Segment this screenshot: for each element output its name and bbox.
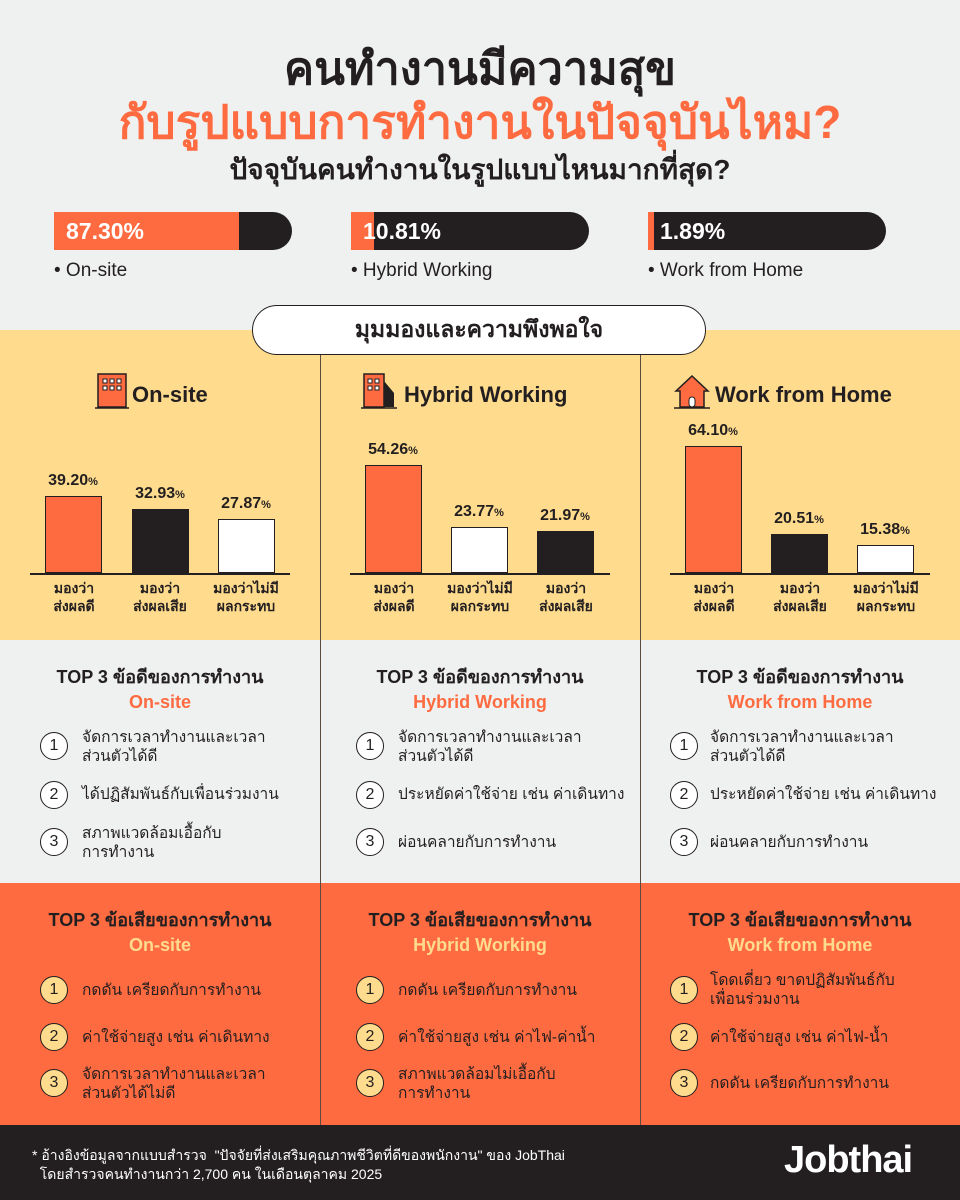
yellow section [0, 330, 960, 640]
legend: hybrid: • Hybrid Working [351, 260, 492, 281]
footer [0, 1125, 960, 1200]
panel: cons hybrid [356, 910, 595, 1102]
footnote [32, 1146, 565, 1183]
panel: pros on-site: ส่วนตัวได้ดี [82, 748, 157, 765]
panel: on-site chart: ส่งผลเสีย [133, 598, 187, 614]
panel: wfh chart: 15.38% [860, 521, 910, 538]
panel: pros hybrid: ประหยัดค่าใช้จ่าย เช่น ค่าเดินทาง [398, 786, 624, 803]
panel: cons on-site: กดดัน เครียดกับการทำงาน [82, 982, 261, 999]
panel: wfh chart: 20.51% [774, 510, 824, 527]
bar: wfh: 1.89% [660, 218, 725, 244]
panel: hybrid chart: มองว่า [546, 580, 586, 596]
panel: on-site chart: มองว่าไม่มี [213, 580, 279, 596]
panel: pros on-site: 3 [50, 833, 58, 850]
panel: on-site chart: 27.87% [221, 495, 271, 512]
footnote: * อ้างอิงข้อมูลจากแบบสำรวจ "ปัจจัยที่ส่งเสริมคุณภาพชีวิตที่ดีของพนักงาน" ของ JobThai [32, 1147, 565, 1163]
panel: hybrid chart: 23.77% [454, 503, 504, 520]
panel: pros hybrid [356, 667, 624, 856]
panel: pros wfh: 2 [680, 786, 688, 803]
bar: on-site: 87.30% [66, 218, 144, 244]
panel: cons on-site: ค่าใช้จ่ายสูง เช่น ค่าเดินทาง [82, 1029, 270, 1046]
panel: pros on-site: จัดการเวลาทำงานและเวลา [82, 729, 266, 746]
panel: wfh chart: Work from Home [715, 382, 892, 407]
panel: cons wfh: ค่าใช้จ่ายสูง เช่น ค่าไฟ-น้ำ [710, 1029, 888, 1046]
panel: cons on-site: TOP 3 ข้อเสียของการทำงาน [49, 910, 271, 930]
panel: hybrid chart: ส่งผลเสีย [539, 598, 593, 614]
panel: pros on-site: สภาพแวดล้อมเอื้อกับ [82, 825, 222, 842]
panel: pros hybrid: 2 [366, 786, 374, 803]
panel: pros on-site: 1 [50, 737, 58, 754]
panel: cons hybrid: Hybrid Working [413, 935, 547, 955]
panel: cons hybrid: TOP 3 ข้อเสียของการทำงาน [369, 910, 591, 930]
panel: pros wfh: จัดการเวลาทำงานและเวลา [710, 729, 894, 746]
icon: hybrid building [361, 373, 397, 409]
panel: cons hybrid: 1 [366, 981, 374, 998]
panel: wfh chart [670, 375, 930, 614]
panel: on-site chart: 39.20% [48, 472, 98, 489]
logo: Jobthai [784, 1139, 912, 1181]
panel: cons on-site: ส่วนตัวได้ไม่ดี [82, 1085, 175, 1102]
panel: hybrid chart: มองว่าไม่มี [447, 580, 513, 596]
panel: cons wfh: TOP 3 ข้อเสียของการทำงาน [689, 910, 911, 930]
panel: pros hybrid: TOP 3 ข้อดีของการทำงาน [377, 667, 583, 687]
panel: hybrid chart: 54.26% [368, 441, 418, 458]
panel: hybrid chart [350, 373, 610, 614]
legend: wfh: • Work from Home [648, 260, 803, 281]
panel: cons on-site: 2 [50, 1028, 58, 1045]
panel: cons on-site: จัดการเวลาทำงานและเวลา [82, 1066, 266, 1083]
panel: pros wfh: ประหยัดค่าใช้จ่าย เช่น ค่าเดินทาง [710, 786, 936, 803]
gray section [0, 640, 960, 883]
panel: cons wfh: กดดัน เครียดกับการทำงาน [710, 1075, 889, 1092]
panel: wfh chart: ส่งผลดี [693, 598, 735, 614]
panel: pros on-site: การทำงาน [82, 844, 154, 861]
panel: cons hybrid: 2 [366, 1028, 374, 1045]
panel: cons wfh: เพื่อนร่วมงาน [710, 991, 800, 1008]
panel: pros hybrid: Hybrid Working [413, 692, 547, 712]
panel: wfh chart: 64.10% [688, 422, 738, 439]
panel: pros hybrid: ผ่อนคลายกับการทำงาน [398, 834, 556, 851]
title [119, 43, 841, 187]
bar: hybrid [351, 212, 589, 250]
panel: wfh chart: มองว่า [694, 580, 734, 596]
panel: pros on-site: On-site [129, 692, 191, 712]
panel: cons hybrid: 3 [366, 1074, 374, 1091]
title: ปัจจุบันคนทำงานในรูปแบบไหนมากที่สุด? [230, 154, 730, 185]
panel: cons on-site: 3 [50, 1074, 58, 1091]
panel: on-site chart: 32.93% [135, 485, 185, 502]
panel: cons hybrid: การทำงาน [398, 1085, 470, 1102]
panel: cons wfh: โดดเดี่ยว ขาดปฏิสัมพันธ์กับ [710, 972, 895, 989]
pill heading [252, 305, 706, 355]
icon: building [95, 373, 129, 409]
panel: cons wfh: Work from Home [728, 935, 872, 955]
panel: cons hybrid: ค่าใช้จ่ายสูง เช่น ค่าไฟ-ค่าน้ำ [398, 1029, 595, 1046]
panel: pros wfh: 1 [680, 737, 688, 754]
panel: wfh chart: ส่งผลเสีย [773, 598, 827, 614]
bar: wfh [648, 212, 886, 250]
panel: on-site chart: On-site [132, 382, 208, 407]
panel: cons wfh: 3 [680, 1074, 688, 1091]
panel: pros on-site: 2 [50, 786, 58, 803]
panel: on-site chart: ส่งผลดี [53, 598, 95, 614]
panel: cons on-site: 1 [50, 981, 58, 998]
panel: pros wfh: ผ่อนคลายกับการทำงาน [710, 834, 868, 851]
panel: pros on-site: TOP 3 ข้อดีของการทำงาน [57, 667, 263, 687]
panel: pros hybrid: 3 [366, 833, 374, 850]
panel: hybrid chart: Hybrid Working [404, 382, 567, 407]
icon: house [674, 375, 710, 409]
footnote: โดยสำรวจคนทำงานกว่า 2,700 คน ในเดือนตุลาคม 2025 [40, 1166, 382, 1182]
panel: wfh chart: ผลกระทบ [857, 598, 915, 614]
panel: hybrid chart: มองว่า [374, 580, 414, 596]
bar: on-site [54, 212, 292, 250]
panel: cons wfh: 1 [680, 981, 688, 998]
title: คนทำงานมีความสุข [284, 43, 676, 94]
panel: on-site chart: ผลกระทบ [217, 598, 275, 614]
panel: hybrid chart: 21.97% [540, 507, 590, 524]
panel: on-site chart: มองว่า [54, 580, 94, 596]
legend: on-site: • On-site [54, 260, 127, 281]
panel: hybrid chart: ส่งผลดี [373, 598, 415, 614]
panel: wfh chart: มองว่าไม่มี [853, 580, 919, 596]
panel: cons on-site [40, 910, 272, 1102]
panel: pros wfh: TOP 3 ข้อดีของการทำงาน [697, 667, 903, 687]
panel: cons hybrid: กดดัน เครียดกับการทำงาน [398, 982, 577, 999]
panel: pros hybrid: ส่วนตัวได้ดี [398, 748, 473, 765]
panel: on-site chart: มองว่า [140, 580, 180, 596]
panel: wfh chart: มองว่า [780, 580, 820, 596]
panel: pros wfh [670, 667, 936, 856]
panel: pros on-site: ได้ปฏิสัมพันธ์กับเพื่อนร่วมงาน [82, 786, 279, 803]
panel: pros hybrid: 1 [366, 737, 374, 754]
panel: pros wfh: 3 [680, 833, 688, 850]
title: กับรูปแบบการทำงานในปัจจุบันไหม? [119, 96, 841, 148]
panel: cons on-site: On-site [129, 935, 191, 955]
pill heading: มุมมองและความพึงพอใจ [355, 316, 603, 342]
panel: cons wfh: 2 [680, 1028, 688, 1045]
panel: pros wfh: Work from Home [728, 692, 872, 712]
panel: pros hybrid: จัดการเวลาทำงานและเวลา [398, 729, 582, 746]
panel: cons hybrid: สภาพแวดล้อมไม่เอื้อกับ [398, 1066, 556, 1083]
panel: hybrid chart: ผลกระทบ [451, 598, 509, 614]
panel: pros on-site [40, 667, 279, 861]
orange section [0, 883, 960, 1125]
panel: on-site chart [30, 373, 290, 614]
panel: pros wfh: ส่วนตัวได้ดี [710, 748, 785, 765]
bar: hybrid: 10.81% [363, 218, 441, 244]
panel: cons wfh [670, 910, 912, 1097]
